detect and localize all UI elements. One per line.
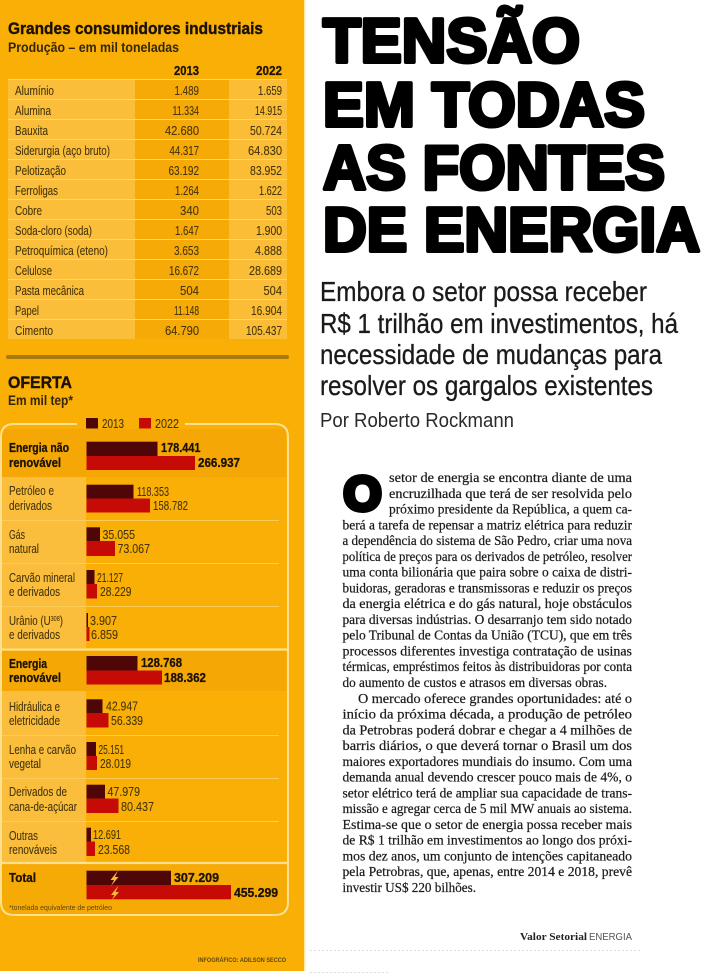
row: petróleo e derivados: derivados bbox=[9, 499, 52, 513]
table rows: Cimento bbox=[15, 324, 53, 338]
table rows: Alumina bbox=[15, 104, 51, 118]
row: hidráulica e eletricidade: 56.339 bbox=[111, 714, 143, 728]
row: outras renováveis: 23.568 bbox=[98, 843, 130, 857]
row: petróleo e derivados: Petróleo e bbox=[9, 484, 54, 498]
chart: oferta bars bbox=[1, 424, 288, 915]
heading: oferta bbox=[8, 373, 74, 408]
row: carvão mineral e derivados: 28.229 bbox=[100, 585, 132, 599]
heading: grandes consumidores: Grandes consumidores industriais bbox=[8, 19, 263, 38]
row: urânio e derivados: e derivados bbox=[9, 628, 60, 642]
byline: Por Roberto Rockmann bbox=[320, 410, 514, 432]
article text: da Petrobras poderá dobrar e chegar a 4 milhões de bbox=[342, 722, 632, 737]
article text: demanda anual devendo crescer pouco mais de 4%, o bbox=[342, 770, 632, 785]
drop cap: O bbox=[344, 468, 382, 521]
table rows: 1.900 bbox=[256, 224, 282, 238]
heading: oferta: Em mil tep* bbox=[8, 393, 74, 408]
row: energia renovável bbox=[9, 656, 206, 685]
footnote: *tonelada equivalente de petróleo bbox=[9, 903, 112, 912]
table rows: Celulose bbox=[15, 264, 52, 278]
table rows: Pasta mecânica bbox=[15, 284, 84, 298]
row: energia renovável: 188.362 bbox=[164, 671, 206, 685]
title: TENSÃO bbox=[323, 7, 580, 76]
table rows: 504 bbox=[180, 284, 199, 298]
row: energia renovável: 128.768 bbox=[141, 656, 182, 670]
article text: política de preços para os derivados de petróleo, resolver bbox=[342, 549, 632, 564]
row: urânio e derivados: 308 bbox=[51, 615, 60, 623]
heading: grandes consumidores: Produção – em mil toneladas bbox=[8, 40, 179, 55]
article text: do aumento de custos e atrasos em diversas obras. bbox=[342, 675, 607, 690]
title: AS FONTES bbox=[323, 134, 665, 203]
table rows: 504 bbox=[264, 284, 282, 298]
row: energia não renovável: Energia não bbox=[9, 441, 69, 455]
row: petróleo e derivados bbox=[9, 484, 188, 513]
row: urânio e derivados: 3.907 bbox=[90, 614, 117, 628]
row: gás natural: natural bbox=[9, 542, 39, 556]
panel: orange sidebar bbox=[0, 0, 306, 971]
subtitle: resolver os gargalos existentes bbox=[320, 370, 653, 401]
publication tag: Valor Setorial bbox=[520, 932, 587, 943]
table rows: Siderurgia (aço bruto) bbox=[15, 144, 110, 158]
row: carvão mineral e derivados bbox=[9, 570, 132, 599]
subtitle bbox=[320, 276, 678, 401]
row: urânio e derivados: 6.859 bbox=[91, 628, 118, 642]
row: energia renovável: renovável bbox=[9, 671, 61, 685]
table rows: 11.334 bbox=[172, 104, 199, 118]
row: energia não renovável: 266.937 bbox=[198, 456, 240, 470]
row: derivados de cana-de-açúcar bbox=[9, 785, 154, 814]
article text: da energia elétrica e do gás natural, hoje obstáculos bbox=[342, 596, 632, 611]
row: urânio e derivados: Urânio (U bbox=[9, 615, 51, 628]
row: lenha e carvão vegetal: vegetal bbox=[9, 757, 41, 771]
table rows: Soda-cloro (soda) bbox=[15, 224, 92, 238]
table rows: Papel bbox=[15, 304, 39, 318]
row: lenha e carvão vegetal: 25.151 bbox=[98, 743, 124, 757]
article text: barris diários, o que deverá tornar o Brasil um dos bbox=[342, 738, 632, 753]
heading: oferta: OFERTA bbox=[8, 373, 72, 392]
row: outras renováveis: renováveis bbox=[9, 843, 57, 857]
row: total bbox=[9, 870, 278, 900]
table rows: 4.888 bbox=[255, 244, 282, 258]
table rows: 1.264 bbox=[175, 184, 199, 198]
article text: para diversas indústrias. O desarranjo tem sido notado bbox=[342, 612, 632, 627]
row: outras renováveis: Outras bbox=[9, 829, 38, 843]
publication tag bbox=[520, 932, 632, 943]
table rows: Bauxita bbox=[15, 124, 48, 138]
row: derivados de cana-de-açúcar: Derivados de bbox=[9, 785, 67, 799]
article text: uma conta bilionária que paira sobre o caixa de distri- bbox=[342, 565, 632, 580]
row: gás natural: Gás bbox=[9, 528, 25, 542]
table rows: 28.689 bbox=[249, 264, 282, 278]
table rows: 1.659 bbox=[258, 84, 282, 98]
row: total: 455.299 bbox=[234, 886, 278, 900]
article text bbox=[342, 470, 632, 895]
icon: lightning bolts bbox=[110, 870, 119, 900]
article text: maiores exportadores mundiais do insumo. Com uma bbox=[342, 754, 632, 769]
heading: grandes consumidores bbox=[8, 19, 263, 55]
table rows: 1.622 bbox=[259, 184, 282, 198]
row: derivados de cana-de-açúcar: 80.437 bbox=[121, 800, 154, 814]
row: total: 307.209 bbox=[174, 871, 219, 885]
row: carvão mineral e derivados: e derivados bbox=[9, 585, 60, 599]
article text: buidoras, geradoras e transmissoras e reduzir os preços bbox=[342, 580, 632, 595]
row: derivados de cana-de-açúcar: 47.979 bbox=[108, 785, 140, 799]
article text: pela Petrobras, que, apenas, entre 2014 e 2018, prevê bbox=[342, 864, 632, 879]
article text: mos dez anos, um conjunto de intenções capitaneado bbox=[342, 848, 632, 864]
article text: O mercado oferece grandes oportunidades: até o bbox=[358, 691, 632, 706]
table: consumers production bbox=[8, 64, 287, 339]
row: urânio e derivados bbox=[9, 613, 118, 642]
row: lenha e carvão vegetal: 28.019 bbox=[100, 757, 131, 771]
table rows: 11.148 bbox=[174, 304, 199, 318]
table rows: 3.653 bbox=[174, 244, 199, 258]
article text: berá a tarefa de repensar a matriz elétrica para reduzir bbox=[342, 517, 632, 532]
legend: 2022 bbox=[155, 417, 179, 431]
table rows: 340 bbox=[180, 204, 199, 218]
article text: setor de energia se encontra diante de uma bbox=[389, 470, 632, 485]
publication tag: ENERGIA bbox=[589, 932, 632, 943]
table rows: Ferroligas bbox=[15, 184, 58, 198]
row: outras renováveis: 12.691 bbox=[93, 828, 121, 842]
row: petróleo e derivados: 118.353 bbox=[137, 485, 169, 499]
table rows: Cobre bbox=[15, 204, 42, 218]
article text: próximo presidente da República, a quem ca- bbox=[389, 502, 632, 516]
credit: INFOGRÁFICO: ADILSON SECCO bbox=[198, 955, 286, 964]
article text: processos diferentes investiga contratação de usinas bbox=[342, 644, 632, 658]
row: outras renováveis bbox=[9, 828, 130, 857]
subtitle: necessidade de mudanças para bbox=[320, 339, 662, 370]
table rows: 1.489 bbox=[174, 84, 199, 98]
row: hidráulica e eletricidade: Hidráulica e bbox=[9, 700, 60, 714]
legend: 2013 bbox=[102, 417, 124, 431]
row: gás natural: 73.067 bbox=[118, 542, 150, 556]
table rows: 50.724 bbox=[250, 124, 282, 138]
table header years: 2022 bbox=[256, 64, 282, 78]
row: gás natural bbox=[9, 527, 150, 556]
row: hidráulica e eletricidade: eletricidade bbox=[9, 714, 60, 728]
row: hidráulica e eletricidade bbox=[9, 699, 143, 728]
table rows: 16.672 bbox=[169, 264, 199, 278]
row: hidráulica e eletricidade: 42.947 bbox=[106, 700, 138, 714]
legend bbox=[86, 417, 179, 431]
table rows: 16.904 bbox=[251, 304, 282, 318]
article text: pelo Tribunal de Contas da União (TCU), que em três bbox=[342, 628, 632, 644]
article text: encruzilhada que terá de ser resolvida pelo bbox=[389, 486, 632, 501]
title bbox=[323, 7, 700, 265]
table rows: Petroquímica (eteno) bbox=[15, 244, 108, 258]
table rows bbox=[15, 84, 282, 338]
table rows: 503 bbox=[266, 204, 282, 218]
table header years bbox=[174, 64, 282, 78]
row: gás natural: 35.055 bbox=[102, 528, 135, 542]
row: energia renovável: Energia bbox=[9, 657, 48, 671]
row: lenha e carvão vegetal: Lenha e carvão bbox=[9, 743, 76, 757]
table rows: 64.830 bbox=[248, 144, 282, 158]
row: total: Total bbox=[9, 871, 36, 885]
row: urânio e derivados: ) bbox=[60, 615, 63, 628]
table rows: 64.790 bbox=[165, 324, 199, 338]
row: energia não renovável: renovável bbox=[9, 456, 61, 470]
article text: setor elétrico terá de ampliar sua capacidade de trans- bbox=[342, 785, 632, 800]
table rows: Alumínio bbox=[15, 84, 54, 98]
table rows: 14.915 bbox=[255, 104, 282, 118]
article text: térmicas, empréstimos feitos às distribuidoras por conta bbox=[342, 659, 632, 674]
row: carvão mineral e derivados: 21.127 bbox=[97, 571, 123, 585]
row: derivados de cana-de-açúcar: cana-de-açúcar bbox=[9, 800, 77, 814]
title: DE ENERGIA bbox=[323, 196, 700, 265]
article text: Estima-se que o setor de energia possa receber mais bbox=[342, 817, 632, 832]
table rows: 63.192 bbox=[168, 164, 199, 178]
row: lenha e carvão vegetal bbox=[9, 742, 131, 771]
article text: de R$ 1 trilhão em investimentos ao longo dos próxi- bbox=[342, 833, 632, 848]
row: energia não renovável: 178.441 bbox=[161, 441, 201, 455]
subtitle: Embora o setor possa receber bbox=[320, 276, 647, 307]
article text: investir US$ 220 bilhões. bbox=[342, 880, 476, 895]
row: petróleo e derivados: 158.782 bbox=[153, 499, 188, 513]
table rows: 83.952 bbox=[250, 164, 282, 178]
row: carvão mineral e derivados: Carvão mineral bbox=[9, 571, 75, 585]
table header years: 2013 bbox=[174, 64, 199, 78]
article text: a dependência do sistema de São Pedro, criar uma nova bbox=[342, 533, 632, 548]
article text: início da próxima década, a produção de petróleo bbox=[342, 707, 632, 722]
article text: missão e agregar cerca de 5 mil MW anuais ao sistema. bbox=[342, 801, 632, 816]
table rows: 105.437 bbox=[246, 324, 282, 338]
table rows: Pelotização bbox=[15, 164, 66, 178]
table rows: 1.647 bbox=[175, 224, 199, 238]
table rows: 42.680 bbox=[165, 124, 199, 138]
table rows: 44.317 bbox=[170, 144, 199, 158]
title: EM TODAS bbox=[323, 71, 645, 140]
row: energia não renovável bbox=[9, 441, 240, 470]
